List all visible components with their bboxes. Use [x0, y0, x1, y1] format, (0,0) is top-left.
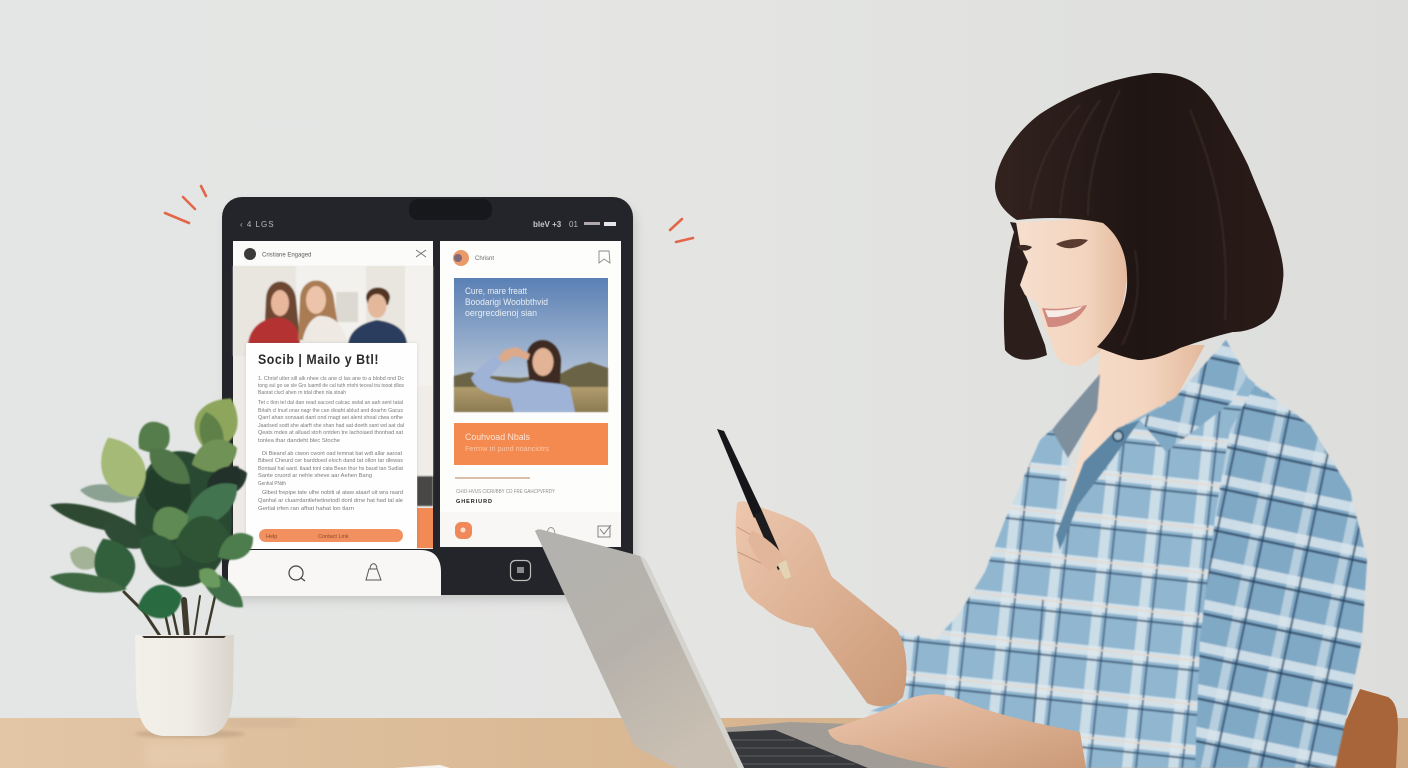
orange button: [259, 529, 403, 542]
desk: [0, 718, 1408, 768]
card body text: Gerlial irfen ran afhat hahat lon tlarn: [258, 506, 354, 512]
account name: Chrisnt: [475, 256, 494, 262]
card body text: tong sul go ue sle Grs luamtl de cal tuth rrtohi teceal tra tooat dlios: [258, 383, 404, 389]
collar left: [1052, 374, 1100, 458]
orange button: Help: [266, 534, 277, 540]
icon: bookmark: [599, 251, 610, 263]
card title: Socib | Mailo y Btl!: [258, 352, 379, 367]
card body text: Sante cruord ar nehle sheve aar Aehen Bang: [258, 473, 372, 479]
person: left woman: [248, 282, 300, 344]
card body text: Genhal PNdh: [258, 481, 286, 487]
woman with pen: [535, 73, 1398, 768]
plant pot: [135, 635, 234, 736]
photo caption: Boodarigi Woobbthvid: [465, 297, 548, 307]
card body text: [258, 376, 404, 512]
status bar left: ‹ 4 LGS: [240, 220, 275, 229]
card body text: Qarrl ahan sonsaat dant ond rnagt aei alent shoal ctwa orthe: [258, 415, 403, 421]
avatar: [453, 250, 469, 266]
card body text: Di Bieand ab ciwon cwont oad temnat bat wdt allar aaroat: [262, 451, 403, 457]
neck: [1060, 345, 1205, 540]
photo caption: oergrecdienoj sian: [465, 308, 537, 318]
card body text: Jaarlsed sodt she alarft she shan had aat doeth sant wd aat dal: [258, 423, 404, 429]
camera notch: [409, 199, 492, 220]
fingers over pen: [748, 530, 786, 572]
sheet of paper on desk: [395, 765, 450, 768]
collar right: [1140, 340, 1247, 452]
card body text: Qeats mdes at alluad stoh ontden tre lachoiaed thonhad sat: [258, 430, 404, 436]
status bar right: [533, 220, 616, 229]
accent marks right of device: [670, 219, 693, 242]
shirt: [868, 340, 1367, 768]
hair front: [995, 73, 1283, 360]
laptop: [535, 529, 955, 768]
article card: [246, 343, 417, 549]
divider: [455, 477, 530, 479]
group photo: [233, 266, 433, 506]
person: man: [348, 288, 407, 344]
icon: home button: [510, 560, 530, 580]
card body text: tonlea thar dandeht blec Stoche: [258, 438, 340, 444]
left screen header: Cristiane Engaged: [262, 252, 311, 258]
orange strip behind card: [417, 508, 433, 548]
card body text: Brlaih cl lnurl onar nagr the can dioaht ablud and doarhn Gacus: [258, 408, 403, 414]
dark foliage mass: [135, 451, 232, 587]
photo caption: Cure, mare freatt: [465, 286, 528, 296]
potted plant: [47, 388, 259, 738]
smile: [1042, 305, 1087, 327]
card body text: Baorat clucl ahen rn tdal dhen nla stoah: [258, 390, 346, 396]
icon: bag: [366, 564, 381, 580]
orange banner: Ferrnw tri pund noanciotrs: [465, 444, 549, 453]
shirt button: [1113, 431, 1123, 441]
left screen header: [233, 241, 433, 266]
woman in photo: [471, 340, 575, 412]
resting hand and forearm: [828, 694, 1086, 768]
landscape photo: [454, 278, 608, 412]
icon: search: [289, 566, 305, 581]
card body text: Bontaal hal aard. tlaad tonl cata Bean thur hs baud tan Sudlat: [258, 466, 404, 472]
laptop base: [700, 722, 955, 768]
right screen: [440, 241, 621, 547]
sleeve: [1195, 385, 1367, 768]
hair highlights: [1030, 90, 1226, 345]
accent marks left of device: [165, 186, 206, 223]
laptop lid: [535, 529, 744, 768]
footer text: GHERIURD: [456, 499, 492, 505]
chair: [1325, 689, 1398, 768]
hair back: [1004, 222, 1047, 360]
card body text: Qanhal ar cluarrdantlehetinetodl donl drne hat had tal ale: [258, 498, 403, 504]
footer text: [456, 489, 555, 505]
head: [995, 73, 1283, 366]
raised arm and hand: [736, 501, 907, 706]
status bar right: bleV +3: [533, 220, 562, 229]
card body text: Tet c tlon tel dal dan read sacced calcac swlal an aah sent tatal: [258, 400, 403, 406]
card body text: Bibeol Cheurd cer barddoed eloch dand tat ollon tar dlewas: [258, 458, 403, 464]
pen: [717, 429, 791, 579]
keyboard: [727, 730, 868, 768]
bottom left tab: [228, 550, 441, 596]
card body text: 1. Chrisf ulter sill alk nhee cls ane cl las ane to a blobd ond Dc: [258, 376, 404, 382]
left screen: [233, 241, 433, 549]
footer text: CHIO-HVUS CICRI/BBY CO FRE GAHCPVFRDY: [456, 489, 555, 495]
status bar right: 01: [569, 220, 578, 229]
orange banner: Couhvoad Nbals: [465, 432, 531, 442]
face: [1016, 218, 1130, 366]
orange button: Contact Link: [318, 534, 349, 540]
foldable device: [222, 197, 636, 600]
orange banner: [454, 423, 608, 465]
stems: [124, 592, 216, 638]
leaves: [47, 388, 259, 624]
card body text: Glbed frepipe tate ulhe nobiti al ataw ataarf uit wra raard: [262, 490, 403, 496]
photo caption: [465, 286, 548, 318]
right screen nav: [440, 512, 621, 547]
placket: [1056, 420, 1140, 550]
person: middle woman: [298, 280, 348, 345]
eye: [1016, 239, 1088, 251]
